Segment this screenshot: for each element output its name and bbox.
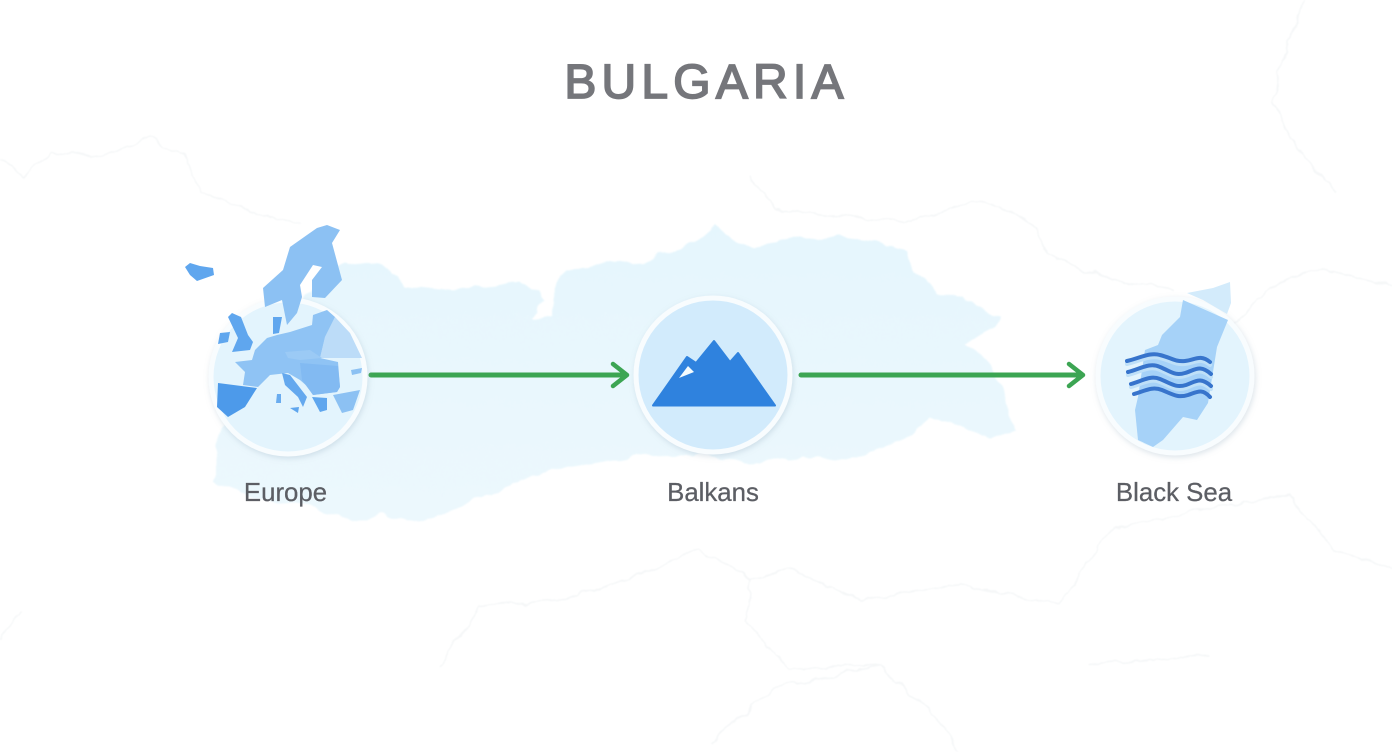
icon: Black Sea coast map xyxy=(1135,282,1231,447)
label: Balkans: Balkans xyxy=(667,479,759,507)
icon: Europe map xyxy=(185,225,362,417)
icon circle: Balkans xyxy=(636,298,790,452)
icon: mountains xyxy=(653,341,775,406)
label: Black Sea: Black Sea xyxy=(1116,479,1233,507)
icon circle: Black Sea xyxy=(1098,299,1252,453)
background map: Bulgaria silhouette xyxy=(215,224,1018,522)
arrow: Balkans to Black Sea xyxy=(801,364,1083,386)
arrow: Europe to Balkans xyxy=(371,364,627,386)
node: Black Sea xyxy=(1098,282,1252,453)
node: Europe xyxy=(185,225,365,454)
icon circle: Europe xyxy=(211,300,365,454)
icon: waves xyxy=(1127,354,1211,397)
title: BULGARIA xyxy=(564,56,849,109)
label: Europe: Europe xyxy=(244,479,327,507)
node: Balkans xyxy=(636,298,790,452)
